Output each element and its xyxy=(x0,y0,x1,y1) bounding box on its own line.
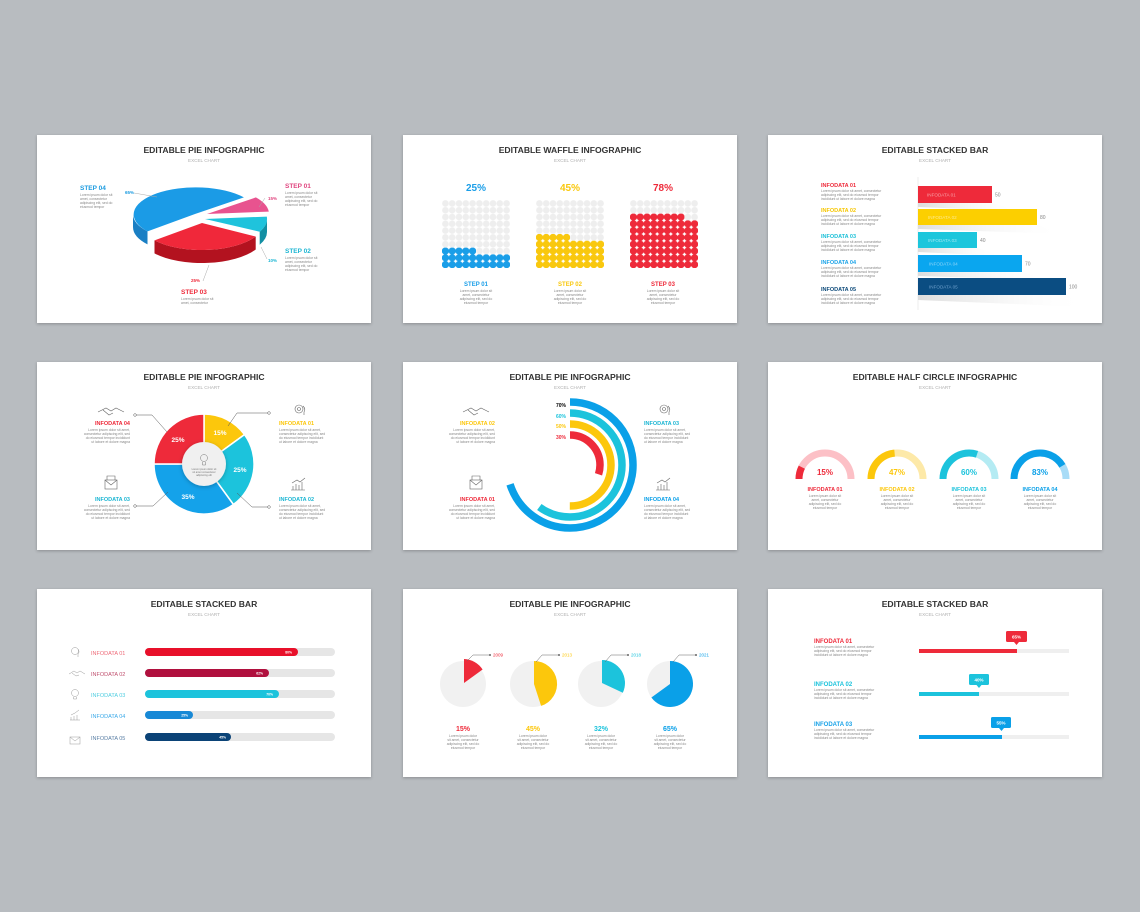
pie 2013: 45%: adipiscing elit, sed do xyxy=(517,742,549,746)
label: step 01: amet, consectetur xyxy=(285,195,313,199)
bar labels: INFODATA 04 xyxy=(91,714,125,720)
label: infodata 03 with head icon: do eiusmod tempor incididunt xyxy=(644,436,688,440)
label: step 03: STEP 03 xyxy=(181,289,207,296)
waffle 2: 45%: 45% xyxy=(560,183,580,194)
label: infodata 01 with head icon: INFODATA 01 xyxy=(279,421,314,427)
label: infodata 04 with handshake icon: consectetur adipiscing elit, sed xyxy=(84,432,130,436)
row 1: 65%: INFODATA 01 xyxy=(814,639,853,645)
row 2: 40% xyxy=(814,674,1069,700)
row 1: 65% xyxy=(814,631,1069,657)
gauge 2: 47%: amet, consectetur xyxy=(884,498,911,502)
pie 2013: 45%: sit amet, consectetur xyxy=(517,738,550,742)
heading: EDITABLE PIE INFOGRAPHIC xyxy=(509,599,631,609)
heading xyxy=(151,599,258,617)
row 3: 55%: 55% xyxy=(996,720,1006,726)
left labels: adipiscing elit, sed do eiusmod tempor xyxy=(821,193,880,197)
left labels: INFODATA 02 xyxy=(821,208,856,214)
label: step 01: eiusmod tempor xyxy=(285,203,310,207)
label: infodata 04 with chart icon: INFODATA 04 xyxy=(644,497,680,503)
left labels: Lorem ipsum dolor sit amet, consectetur xyxy=(821,189,882,193)
heading: EDITABLE PIE INFOGRAPHIC xyxy=(143,145,265,155)
label: step 04: adipiscing elit, sed do xyxy=(80,201,113,205)
label: infodata 01 with envelope icon: consectetur adipiscing elit, sed xyxy=(449,508,495,512)
waffle 3: 78%: STEP 03 xyxy=(651,282,676,288)
gauge 3: 60%: INFODATA 03 xyxy=(951,487,987,493)
gauge 4: 83%: Lorem ipsum dolor sit xyxy=(1024,494,1056,498)
waffle 1: 25%: 25% xyxy=(466,183,486,194)
label: step 01: adipiscing elit, sed do xyxy=(285,199,318,203)
gauge 1: 15%: adipiscing elit, sed do xyxy=(809,502,841,506)
gauge 1: 15%: amet, consectetur xyxy=(812,498,839,502)
panel: half circle infographic xyxy=(768,362,1102,550)
heading xyxy=(143,372,265,390)
left labels xyxy=(821,183,882,305)
pie 2021: 65%: adipiscing elit, sed do xyxy=(654,742,686,746)
label: infodata 02 with handshake icon: INFODATA 02 xyxy=(460,421,495,427)
panel: four pies by year xyxy=(403,589,737,777)
pie 2021: 65% xyxy=(647,653,710,750)
left labels: INFODATA 05 xyxy=(821,287,856,293)
left labels: INFODATA 03 xyxy=(821,234,856,240)
heading xyxy=(509,599,631,617)
label: infodata 01 with head icon xyxy=(279,405,325,444)
gauge 3: 60%: Lorem ipsum dolor sit xyxy=(953,494,985,498)
pie 2021: 65%: 2021 xyxy=(699,653,710,658)
label: infodata 04 with handshake icon xyxy=(84,408,131,444)
donut chart: 25% xyxy=(171,437,185,444)
pie 2018: 32%: adipiscing elit, sed do xyxy=(585,742,617,746)
gauge 3: 60%: 60% xyxy=(961,468,977,477)
label: infodata 04 with chart icon: ut labore et dolore magna xyxy=(644,516,683,520)
bar labels: INFODATA 02 xyxy=(91,672,125,678)
label: step 02: amet, consectetur xyxy=(285,260,313,264)
panel: progress bars with tooltips xyxy=(768,589,1102,777)
arc percentages: 50% xyxy=(556,424,567,430)
gauge 1: 15%: Lorem ipsum dolor sit xyxy=(809,494,841,498)
row 3: 55%: Lorem ipsum dolor sit amet, consectetur xyxy=(814,728,875,732)
bar chart: INFODATA 02 xyxy=(928,215,957,220)
label: infodata 01 with envelope icon: do eiusmod tempor incididunt xyxy=(451,512,495,516)
arc percentages xyxy=(556,403,567,441)
panel: progress bars with icons xyxy=(37,589,371,777)
heading: EDITABLE PIE INFOGRAPHIC xyxy=(509,372,631,382)
row 2: 40%: 40% xyxy=(974,678,984,682)
gauge 3: 60%: eiusmod tempor xyxy=(957,506,982,510)
row 2: 40%: INFODATA 02 xyxy=(814,682,853,688)
label: infodata 02 with chart icon: consectetur adipiscing elit, sed xyxy=(279,508,325,512)
label: infodata 02 with handshake icon: ut labore et dolore magna xyxy=(456,440,495,444)
label: step 02: 10% xyxy=(268,258,277,263)
label: infodata 01 with head icon: do eiusmod tempor incididunt xyxy=(279,436,323,440)
pie 2013: 45%: 2013 xyxy=(562,653,573,658)
heading: EDITABLE HALF CIRCLE INFOGRAPHIC xyxy=(853,372,1017,382)
pie 2018: 32%: 2018 xyxy=(631,653,642,658)
label: infodata 03 with envelope icon: Lorem ipsum dolor sit amet, xyxy=(88,504,130,508)
label: step 01 xyxy=(268,183,318,207)
label: step 04: Lorem ipsum dolor sit xyxy=(80,193,112,197)
label: step 01: 15% xyxy=(268,196,277,201)
label: infodata 01 with envelope icon xyxy=(449,476,495,520)
label: infodata 04 with handshake icon: INFODATA 04 xyxy=(95,421,131,427)
gauge 3: 60% xyxy=(943,453,995,510)
waffle 3: 78%: Lorem ipsum dolor sit xyxy=(647,289,679,293)
waffle 3: 78%: eiusmod tempor xyxy=(651,301,676,305)
left labels: Lorem ipsum dolor sit amet, consectetur xyxy=(821,214,882,218)
label: infodata 01 with head icon: ut labore et dolore magna xyxy=(279,440,318,444)
label: infodata 04 with handshake icon: Lorem ipsum dolor sit amet, xyxy=(88,428,130,432)
label: step 04: STEP 04 xyxy=(80,185,106,192)
heading: EXCEL CHART xyxy=(919,385,951,390)
gauge 2: 47%: INFODATA 02 xyxy=(879,487,915,493)
row 3: 55%: incididunt ut labore et dolore magna xyxy=(814,736,868,740)
bar chart xyxy=(918,177,1088,310)
label: step 03 xyxy=(181,278,213,305)
heading xyxy=(882,599,989,617)
label: infodata 03 with envelope icon: consectetur adipiscing elit, sed xyxy=(84,508,130,512)
waffle 2: 45%: adipiscing elit, sed do xyxy=(554,297,586,301)
donut chart: adipiscing elit xyxy=(196,473,212,477)
bar chart: INFODATA 05 xyxy=(929,284,958,290)
progress bars: 70% xyxy=(266,693,273,697)
bar labels xyxy=(91,651,125,742)
label: infodata 01 with head icon: Lorem ipsum dolor sit amet, xyxy=(279,428,321,432)
label: infodata 01 with envelope icon: Lorem ipsum dolor sit amet, xyxy=(453,504,495,508)
pie 2021: 65%: 65% xyxy=(663,726,678,733)
label: infodata 03 with head icon: ut labore et dolore magna xyxy=(644,440,683,444)
label: infodata 01 with envelope icon: ut labore et dolore magna xyxy=(456,516,495,520)
bar chart: 80 xyxy=(1040,215,1046,221)
left labels: INFODATA 04 xyxy=(821,260,857,266)
label: infodata 04 with chart icon: Lorem ipsum dolor sit amet, xyxy=(644,504,686,508)
label: infodata 04 with chart icon: do eiusmod tempor incididunt xyxy=(644,512,688,516)
label: step 02: Lorem ipsum dolor sit xyxy=(285,256,317,260)
label: infodata 04 with handshake icon: ut labore et dolore magna xyxy=(91,440,130,444)
bar chart: 100 xyxy=(1069,284,1078,290)
bar labels: INFODATA 01 xyxy=(91,651,125,657)
label: infodata 02 with chart icon: Lorem ipsum dolor sit amet, xyxy=(279,504,321,508)
bar chart: 70 xyxy=(1025,262,1031,268)
waffle 2: 45%: Lorem ipsum dolor sit xyxy=(554,289,586,293)
pie 2009: 15%: 15% xyxy=(456,726,471,733)
bar chart: INFODATA 03 xyxy=(928,238,957,243)
waffle 1: 25%: STEP 01 xyxy=(464,282,489,288)
gauge 4: 83%: INFODATA 04 xyxy=(1022,487,1058,493)
row 3: 55% xyxy=(814,717,1069,740)
heading xyxy=(509,372,631,390)
gauge 2: 47% xyxy=(871,453,923,510)
concentric arc chart xyxy=(507,402,633,528)
left labels: incididunt ut labore et dolore magna xyxy=(821,248,875,252)
label: step 03: amet, consectetur xyxy=(181,301,209,305)
left labels: incididunt ut labore et dolore magna xyxy=(821,222,875,226)
waffle 1: 25% xyxy=(442,183,510,305)
label: infodata 01 with envelope icon: INFODATA 01 xyxy=(460,497,495,503)
row 2: 40%: Lorem ipsum dolor sit amet, consectetur xyxy=(814,688,875,692)
pie 2009: 15%: 2009 xyxy=(493,653,504,658)
donut chart xyxy=(154,414,254,514)
heading xyxy=(499,145,641,163)
label: infodata 04 with chart icon: consectetur adipiscing elit, sed xyxy=(644,508,690,512)
label: infodata 02 with chart icon: ut labore et dolore magna xyxy=(279,516,318,520)
left labels: adipiscing elit, sed do eiusmod tempor xyxy=(821,297,880,301)
label: step 02 xyxy=(268,248,318,272)
label: infodata 03 with head icon: INFODATA 03 xyxy=(644,421,679,427)
gauge 4: 83%: adipiscing elit, sed do xyxy=(1024,502,1056,506)
bar chart: INFODATA 04 xyxy=(929,262,958,266)
waffle 3: 78%: amet, consectetur xyxy=(650,293,677,297)
heading: EXCEL CHART xyxy=(188,612,220,617)
donut chart: sit amet consectetur xyxy=(192,470,216,474)
left labels: adipiscing elit, sed do eiusmod tempor xyxy=(821,218,880,222)
3D pie chart xyxy=(133,187,269,281)
gauge 3: 60%: adipiscing elit, sed do xyxy=(953,502,985,506)
bar chart: 50 xyxy=(995,192,1001,198)
label: infodata 02 with chart icon: do eiusmod tempor incididunt xyxy=(279,512,323,516)
connector lines xyxy=(134,412,270,508)
bar labels: INFODATA 03 xyxy=(91,693,125,699)
label: step 04: eiusmod tempor xyxy=(80,205,105,209)
waffle 2: 45%: STEP 02 xyxy=(558,282,583,288)
row 2: 40%: adipiscing elit, sed do eiusmod tempor xyxy=(814,692,873,696)
heading: EXCEL CHART xyxy=(554,385,586,390)
panel: donut pie infographic xyxy=(37,362,371,550)
gauge 4: 83%: amet, consectetur xyxy=(1027,498,1054,502)
label: infodata 02 with chart icon xyxy=(279,478,325,520)
waffle 2: 45% xyxy=(536,183,604,305)
heading xyxy=(143,145,265,163)
label: infodata 02 with chart icon: INFODATA 02 xyxy=(279,497,314,503)
pie 2013: 45%: eiusmod tempor xyxy=(521,746,546,750)
waffle 2: 45%: amet, consectetur xyxy=(557,293,584,297)
gauge 1: 15%: eiusmod tempor xyxy=(813,506,838,510)
label: step 02: adipiscing elit, sed do xyxy=(285,264,318,268)
label: infodata 02 with handshake icon: consectetur adipiscing elit, sed xyxy=(449,432,495,436)
heading: EXCEL CHART xyxy=(188,385,220,390)
label: infodata 02 with handshake icon: do eiusmod tempor incididunt xyxy=(451,436,495,440)
progress bars: 25% xyxy=(181,714,188,718)
label: infodata 03 with head icon: consectetur adipiscing elit, sed xyxy=(644,432,690,436)
gauge 2: 47%: 47% xyxy=(889,468,905,477)
heading: EDITABLE STACKED BAR xyxy=(882,599,989,609)
waffle 2: 45%: eiusmod tempor xyxy=(558,301,583,305)
left labels: Lorem ipsum dolor sit amet, consectetur xyxy=(821,240,882,244)
label: infodata 04 with handshake icon: do eiusmod tempor incididunt xyxy=(86,436,130,440)
gauge 1: 15%: 15% xyxy=(817,468,833,477)
pie 2009: 15%: Lorem ipsum dolor xyxy=(449,734,478,738)
pie 2013: 45% xyxy=(510,653,573,750)
heading: EXCEL CHART xyxy=(554,158,586,163)
progress bars xyxy=(145,648,335,741)
heading: EXCEL CHART xyxy=(188,158,220,163)
pie 2013: 45%: Lorem ipsum dolor xyxy=(519,734,548,738)
pie 2018: 32% xyxy=(578,653,642,750)
arc percentages: 60% xyxy=(556,414,567,420)
panel: stacked bar with shadows xyxy=(768,135,1102,323)
waffle 3: 78% xyxy=(630,183,698,305)
progress bars: 45% xyxy=(219,736,226,740)
label: step 01: STEP 01 xyxy=(285,183,311,190)
row 1: 65%: adipiscing elit, sed do eiusmod tempor xyxy=(814,649,873,653)
gauge 3: 60%: amet, consectetur xyxy=(956,498,983,502)
label: infodata 04 with chart icon xyxy=(644,478,690,520)
gauge 4: 83% xyxy=(1014,453,1066,510)
left labels: INFODATA 01 xyxy=(821,183,856,189)
label: step 03: 25% xyxy=(191,278,200,283)
heading xyxy=(882,145,989,163)
row 1: 65%: 65% xyxy=(1012,634,1021,640)
pie 2018: 32%: eiusmod tempor xyxy=(589,746,614,750)
pie 2021: 65%: eiusmod tempor xyxy=(658,746,683,750)
pie 2009: 15%: eiusmod tempor xyxy=(451,746,476,750)
waffle 1: 25%: eiusmod tempor xyxy=(464,301,489,305)
pie 2013: 45%: 45% xyxy=(526,726,541,733)
panel: concentric arc infographic xyxy=(403,362,737,550)
left labels: Lorem ipsum dolor sit amet, consectetur xyxy=(821,293,882,297)
heading: EXCEL CHART xyxy=(554,612,586,617)
panel: 3D pie infographic xyxy=(37,135,371,323)
donut chart: 35% xyxy=(181,494,195,501)
heading: EDITABLE STACKED BAR xyxy=(151,599,258,609)
row 3: 55%: INFODATA 03 xyxy=(814,722,853,728)
row 1: 65%: incididunt ut labore et dolore magna xyxy=(814,653,868,657)
progress bars: 80% xyxy=(285,651,292,655)
left labels: Lorem ipsum dolor sit amet, consectetur xyxy=(821,266,882,270)
label: infodata 01 with head icon: consectetur adipiscing elit, sed xyxy=(279,432,325,436)
label: step 02: STEP 02 xyxy=(285,248,311,255)
waffle 1: 25%: Lorem ipsum dolor sit xyxy=(460,289,492,293)
donut chart: 15% xyxy=(213,430,227,437)
label: step 03: Lorem ipsum dolor sit xyxy=(181,297,213,301)
gauge 2: 47%: Lorem ipsum dolor sit xyxy=(881,494,913,498)
pie 2018: 32%: Lorem ipsum dolor xyxy=(587,734,616,738)
gauge 4: 83%: eiusmod tempor xyxy=(1028,506,1053,510)
label: step 04: 65% xyxy=(125,190,134,195)
pie 2021: 65%: sit amet, consectetur xyxy=(654,738,687,742)
label: infodata 02 with handshake icon: Lorem ipsum dolor sit amet, xyxy=(453,428,495,432)
label: step 04 xyxy=(80,185,134,209)
label: infodata 03 with envelope icon: INFODATA 03 xyxy=(95,497,130,503)
heading xyxy=(853,372,1017,390)
pie 2009: 15% xyxy=(440,653,504,750)
label: infodata 03 with head icon: Lorem ipsum dolor sit amet, xyxy=(644,428,686,432)
bar labels: INFODATA 05 xyxy=(91,736,125,742)
pie 2009: 15%: sit amet, consectetur xyxy=(447,738,480,742)
label: step 04: amet, consectetur xyxy=(80,197,108,201)
waffle 3: 78%: adipiscing elit, sed do xyxy=(647,297,679,301)
gauge 2: 47%: eiusmod tempor xyxy=(885,506,910,510)
gauge 1: 15% xyxy=(799,453,851,510)
left labels: incididunt ut labore et dolore magna xyxy=(821,274,875,278)
gauge 2: 47%: adipiscing elit, sed do xyxy=(881,502,913,506)
donut chart: Lorem ipsum dolor sit xyxy=(192,467,217,471)
gauge 1: 15%: INFODATA 01 xyxy=(807,487,843,493)
left labels: adipiscing elit, sed do eiusmod tempor xyxy=(821,244,880,248)
waffle 1: 25%: amet, consectetur xyxy=(463,293,490,297)
label: step 02: eiusmod tempor xyxy=(285,268,310,272)
waffle 1: 25%: adipiscing elit, sed do xyxy=(460,297,492,301)
bar chart: 40 xyxy=(980,238,986,244)
heading: EXCEL CHART xyxy=(919,158,951,163)
left labels: incididunt ut labore et dolore magna xyxy=(821,301,875,305)
heading: EDITABLE STACKED BAR xyxy=(882,145,989,155)
pie 2018: 32%: 32% xyxy=(594,726,609,733)
left labels: adipiscing elit, sed do eiusmod tempor xyxy=(821,270,880,274)
progress bars: 62% xyxy=(256,672,263,676)
label: infodata 02 with handshake icon xyxy=(449,408,495,444)
row 2: 40%: incididunt ut labore et dolore magna xyxy=(814,696,868,700)
waffle 3: 78%: 78% xyxy=(653,183,673,194)
heading: EDITABLE WAFFLE INFOGRAPHIC xyxy=(499,145,641,155)
heading: EDITABLE PIE INFOGRAPHIC xyxy=(143,372,265,382)
icons xyxy=(69,648,85,744)
gauge 4: 83%: 83% xyxy=(1032,468,1048,477)
row 3: 55%: adipiscing elit, sed do eiusmod tempor xyxy=(814,732,873,736)
bar chart: INFODATA 01 xyxy=(927,192,956,198)
arc percentages: 70% xyxy=(556,403,567,409)
label: infodata 03 with envelope icon: do eiusmod tempor incididunt xyxy=(86,512,130,516)
panel: waffle infographic xyxy=(403,135,737,323)
pie 2021: 65%: Lorem ipsum dolor xyxy=(656,734,685,738)
donut chart: 25% xyxy=(233,467,247,474)
label: infodata 03 with head icon xyxy=(644,405,690,444)
left labels: incididunt ut labore et dolore magna xyxy=(821,197,875,201)
pie 2009: 15%: adipiscing elit, sed do xyxy=(447,742,479,746)
arc percentages: 30% xyxy=(556,435,567,441)
label: infodata 03 with envelope icon: ut labore et dolore magna xyxy=(91,516,130,520)
label: infodata 03 with envelope icon xyxy=(84,476,130,520)
row 1: 65%: Lorem ipsum dolor sit amet, consectetur xyxy=(814,645,875,649)
pie 2018: 32%: sit amet, consectetur xyxy=(585,738,618,742)
label: step 01: Lorem ipsum dolor sit xyxy=(285,191,317,195)
heading: EXCEL CHART xyxy=(919,612,951,617)
